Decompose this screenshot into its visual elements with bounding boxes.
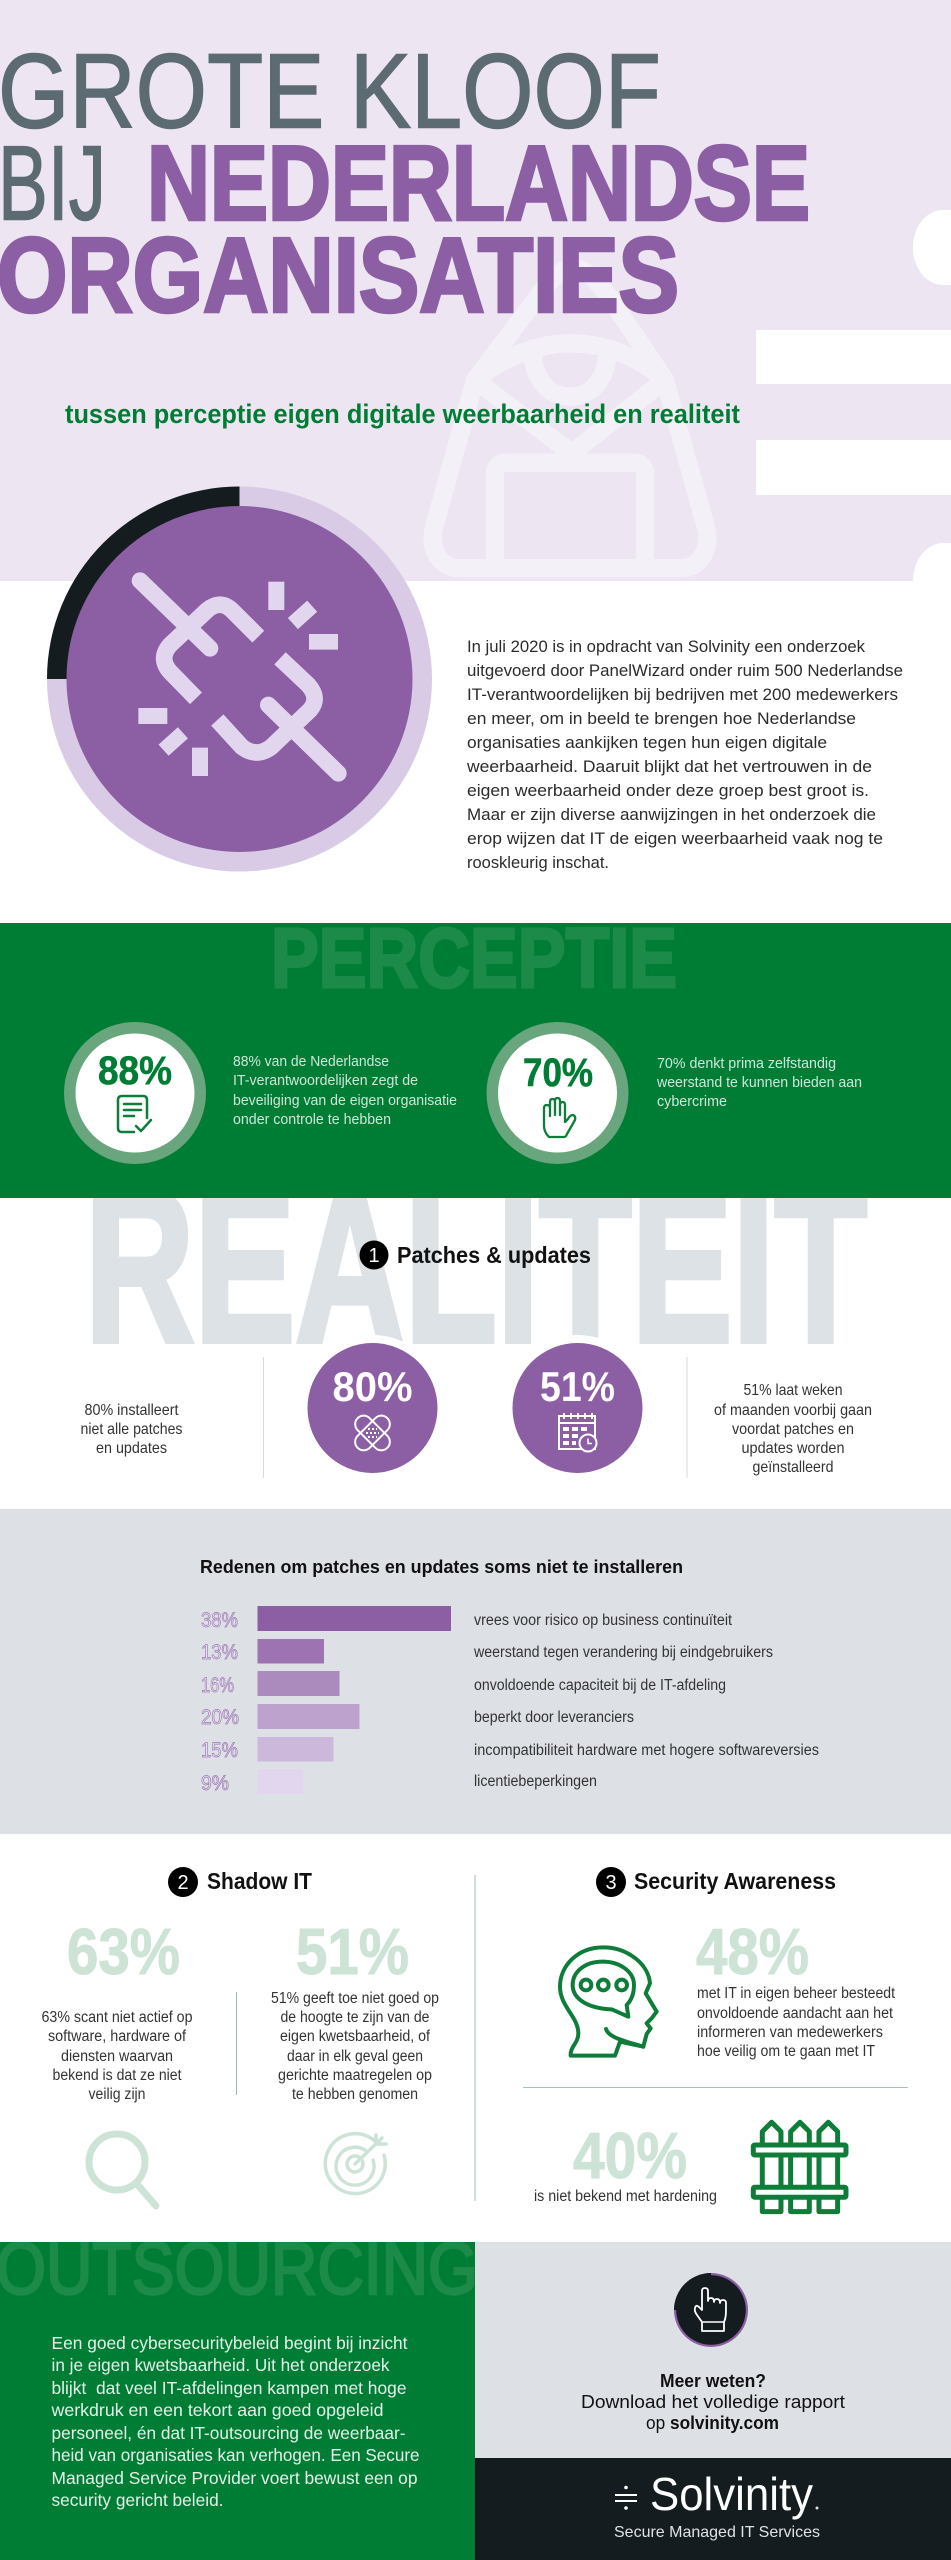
text: 63% description: software, hardware of bbox=[48, 2028, 187, 2045]
panel: shadow IT bbox=[42, 1867, 439, 2206]
logo wordmark: Solvinity bbox=[650, 2468, 813, 2520]
text: 51% description: 51% geeft toe niet goed op bbox=[271, 1990, 439, 2007]
heading: perceptie: PERCEPTIE bbox=[271, 911, 677, 1005]
heading: security awareness: 3 bbox=[605, 1872, 617, 1894]
text: 51% description: te hebben genomen bbox=[292, 2086, 418, 2103]
bar chart: 38% bbox=[201, 1609, 238, 1632]
title: NEDERLANDSE bbox=[147, 124, 810, 242]
text: 51% description: 51% laat weken bbox=[744, 1382, 842, 1399]
text: 80% description: en updates bbox=[96, 1440, 167, 1457]
text: 63% description: 63% scant niet actief op bbox=[42, 2009, 192, 2026]
text block: introduction: In juli 2020 is in opdracht van Solvinity een onderzoek bbox=[467, 637, 865, 656]
text: 51% description: of maanden voorbij gaan bbox=[714, 1402, 872, 1419]
bar chart: 16% bbox=[201, 1674, 234, 1697]
text block: introduction: rooskleurig inschat. bbox=[467, 853, 609, 872]
text block: introduction: organisaties aankijken tegen hun eigen digitale bbox=[467, 733, 827, 752]
text: 48% description bbox=[697, 1985, 896, 2060]
text: 63% description: bekend is dat ze niet bbox=[52, 2067, 182, 2084]
icon: magnifier bbox=[89, 2134, 156, 2206]
heading: shadow IT bbox=[168, 1867, 312, 1897]
stat: 48%: 48% bbox=[696, 1915, 809, 1988]
text: 48% description: met IT in eigen beheer besteedt bbox=[697, 1985, 896, 2002]
text: meer weten: Download het volledige rapport bbox=[581, 2392, 845, 2412]
text: outsourcing paragraph: werkdruk en een tekort aan goed opgeleid bbox=[50, 2400, 384, 2420]
text block: introduction: weerbaarheid. Daaruit blijkt dat het vertrouwen in de bbox=[466, 757, 872, 776]
text: meer weten bbox=[581, 2371, 845, 2433]
text: 51% description: de hoogte te zijn van de bbox=[280, 2009, 430, 2026]
text: 70% description: 70% denkt prima zelfstandig bbox=[657, 1056, 836, 1072]
text: 48% description: informeren van medewerkers bbox=[697, 2024, 883, 2041]
text: 51% description bbox=[714, 1382, 872, 1476]
text: 80% description: niet alle patches bbox=[80, 1421, 182, 1438]
title: ORGANISATIES bbox=[0, 216, 679, 334]
icon: logo mark bbox=[615, 2486, 637, 2510]
title: BIJ bbox=[0, 124, 106, 242]
text: 88% description: 88% van de Nederlandse bbox=[233, 1054, 389, 1070]
text block: introduction: en meer, om in beeld te brengen hoe Nederlandse bbox=[467, 709, 856, 728]
text: outsourcing paragraph: security gericht beleid. bbox=[52, 2490, 224, 2510]
text: 70% description: cybercrime bbox=[657, 1094, 727, 1110]
title: GROTE KLOOF bbox=[0, 32, 661, 150]
panel: solvinity logo bbox=[475, 2458, 951, 2560]
text: 88% description bbox=[233, 1054, 457, 1128]
text: meer weten: op solvinity.com bbox=[646, 2413, 779, 2433]
panel: header bbox=[0, 0, 951, 581]
text: outsourcing paragraph: blijkt dat veel IT-afdelingen kampen met hoge bbox=[52, 2378, 406, 2398]
stat: 70%: 70% bbox=[523, 1051, 593, 1095]
panel: outsourcing bbox=[0, 2227, 478, 2560]
icon: target bbox=[325, 2134, 386, 2194]
text: 48% description: hoe veilig om te gaan met IT bbox=[697, 2043, 875, 2060]
bar chart: onvoldoende capaciteit bij de IT-afdeling bbox=[474, 1677, 726, 1694]
text: 88% description: beveiliging van de eigen organisatie bbox=[233, 1093, 457, 1109]
stat: 51%: 51% bbox=[296, 1915, 409, 1988]
text: 51% description: updates worden bbox=[742, 1440, 844, 1457]
logo tagline: Secure Managed IT Services bbox=[614, 2524, 820, 2541]
text: 88% description: IT-verantwoordelijken zegt de bbox=[233, 1073, 418, 1089]
bar chart: weerstand tegen verandering bij eindgebruikers bbox=[473, 1644, 773, 1661]
logo registered mark bbox=[816, 2506, 818, 2510]
text: 48% description: onvoldoende aandacht aan het bbox=[697, 2005, 894, 2022]
bar chart: beperkt door leveranciers bbox=[474, 1709, 634, 1726]
text: meer weten: Meer weten? bbox=[660, 2371, 766, 2391]
text block: introduction: Maar er zijn diverse aanwijzingen in het onderzoek die bbox=[467, 805, 876, 824]
stat: 88% bbox=[64, 1022, 206, 1164]
icon: hacker watermark bbox=[433, 268, 707, 568]
text: 88% description: onder controle te hebben bbox=[233, 1112, 391, 1128]
text: 80% description bbox=[80, 1402, 182, 1457]
text: 70% description: weerstand te kunnen bieden aan bbox=[656, 1075, 862, 1091]
bar chart bbox=[201, 1606, 819, 1795]
panel: security awareness bbox=[523, 1867, 908, 2212]
bar chart: incompatibiliteit hardware met hogere softwareversies bbox=[474, 1742, 819, 1759]
text: 40% description: is niet bekend met hardening bbox=[534, 2188, 717, 2205]
stat: 80%: 80% bbox=[332, 1363, 412, 1410]
icon: pointing hand bbox=[674, 2273, 748, 2347]
text: outsourcing paragraph: Managed Service Provider voert bewust een op bbox=[52, 2468, 418, 2488]
stat: 80% bbox=[300, 1335, 446, 1481]
heading: shadow IT: Shadow IT bbox=[207, 1868, 312, 1894]
text: 51% description: voordat patches en bbox=[732, 1421, 854, 1438]
text: outsourcing paragraph: in je eigen kwetsbaarheid. Uit het onderzoek bbox=[52, 2355, 390, 2375]
icon: fence bbox=[753, 2122, 846, 2212]
stat: 70% bbox=[486, 1022, 628, 1164]
bar chart: 9% bbox=[201, 1772, 229, 1795]
title bbox=[0, 32, 810, 334]
text: outsourcing paragraph: personeel, én dat IT-outsourcing de weerbaar- bbox=[52, 2423, 406, 2443]
text: outsourcing paragraph: Een goed cybersecuritybeleid begint bij inzicht bbox=[52, 2333, 408, 2353]
text: 80% description: 80% installeert bbox=[84, 1402, 179, 1419]
bar chart: 15% bbox=[201, 1739, 238, 1762]
icon: broken chain circle bbox=[47, 486, 432, 872]
text: 51% description: daar in elk geval geen bbox=[287, 2048, 423, 2065]
text block: introduction bbox=[466, 637, 903, 872]
heading: outsourcing: OUTSOURCING bbox=[0, 2227, 478, 2310]
text: 63% description bbox=[42, 2009, 192, 2103]
bar chart: vrees voor risico op business continuïteit bbox=[474, 1612, 733, 1629]
text block: introduction: erop wijzen dat IT de eigen weerbaarheid vaak nog te bbox=[467, 829, 883, 848]
text block: introduction: uitgevoerd door PanelWizard onder ruim 500 Nederlandse bbox=[467, 661, 903, 680]
text: 70% description bbox=[656, 1056, 862, 1110]
text: 51% description bbox=[271, 1990, 439, 2103]
stat: 88%: 88% bbox=[98, 1049, 172, 1093]
stat: 51%: 51% bbox=[540, 1363, 615, 1410]
chart heading: Redenen om patches en updates soms niet te installeren bbox=[200, 1557, 683, 1577]
heading: patches and updates: Patches & updates bbox=[397, 1242, 591, 1268]
text: 51% description: geïnstalleerd bbox=[752, 1459, 834, 1476]
text: 51% description: eigen kwetsbaarheid, of bbox=[280, 2028, 431, 2045]
icon: head with speech bubble bbox=[560, 1947, 657, 2056]
heading: security awareness bbox=[596, 1867, 836, 1897]
bar chart: 20% bbox=[201, 1706, 239, 1729]
text: 63% description: veilig zijn bbox=[88, 2086, 146, 2103]
panel: call to action bbox=[475, 2242, 951, 2458]
heading: patches and updates: 1 bbox=[368, 1245, 380, 1267]
stat: 51% bbox=[504, 1335, 650, 1481]
text: outsourcing paragraph bbox=[50, 2333, 420, 2510]
heading: security awareness: Security Awareness bbox=[634, 1868, 836, 1894]
text block: introduction: IT-verantwoordelijken bij bedrijven met 200 medewerkers bbox=[467, 685, 898, 704]
stat: 40%: 40% bbox=[573, 2119, 687, 2192]
stat: 63%: 63% bbox=[67, 1915, 180, 1988]
icon: bandage bbox=[352, 1412, 393, 1454]
subtitle: tussen perceptie eigen digitale weerbaarheid en realiteit bbox=[65, 399, 740, 429]
bar chart: licentiebeperkingen bbox=[474, 1773, 597, 1790]
panel: redenen bar chart bbox=[0, 1509, 951, 1834]
text: 51% description: gerichte maatregelen op bbox=[278, 2067, 432, 2084]
icon: calendar bbox=[559, 1413, 596, 1452]
text: 63% description: diensten waarvan bbox=[61, 2048, 173, 2065]
text: outsourcing paragraph: heid van organisaties kan verhogen. Een Secure bbox=[52, 2445, 420, 2465]
text block: introduction: eigen weerbaarheid onder deze groep best groot is. bbox=[467, 781, 869, 800]
panel: perceptie bbox=[0, 911, 951, 1198]
bar chart: 13% bbox=[201, 1641, 238, 1664]
heading: shadow IT: 2 bbox=[177, 1872, 189, 1894]
